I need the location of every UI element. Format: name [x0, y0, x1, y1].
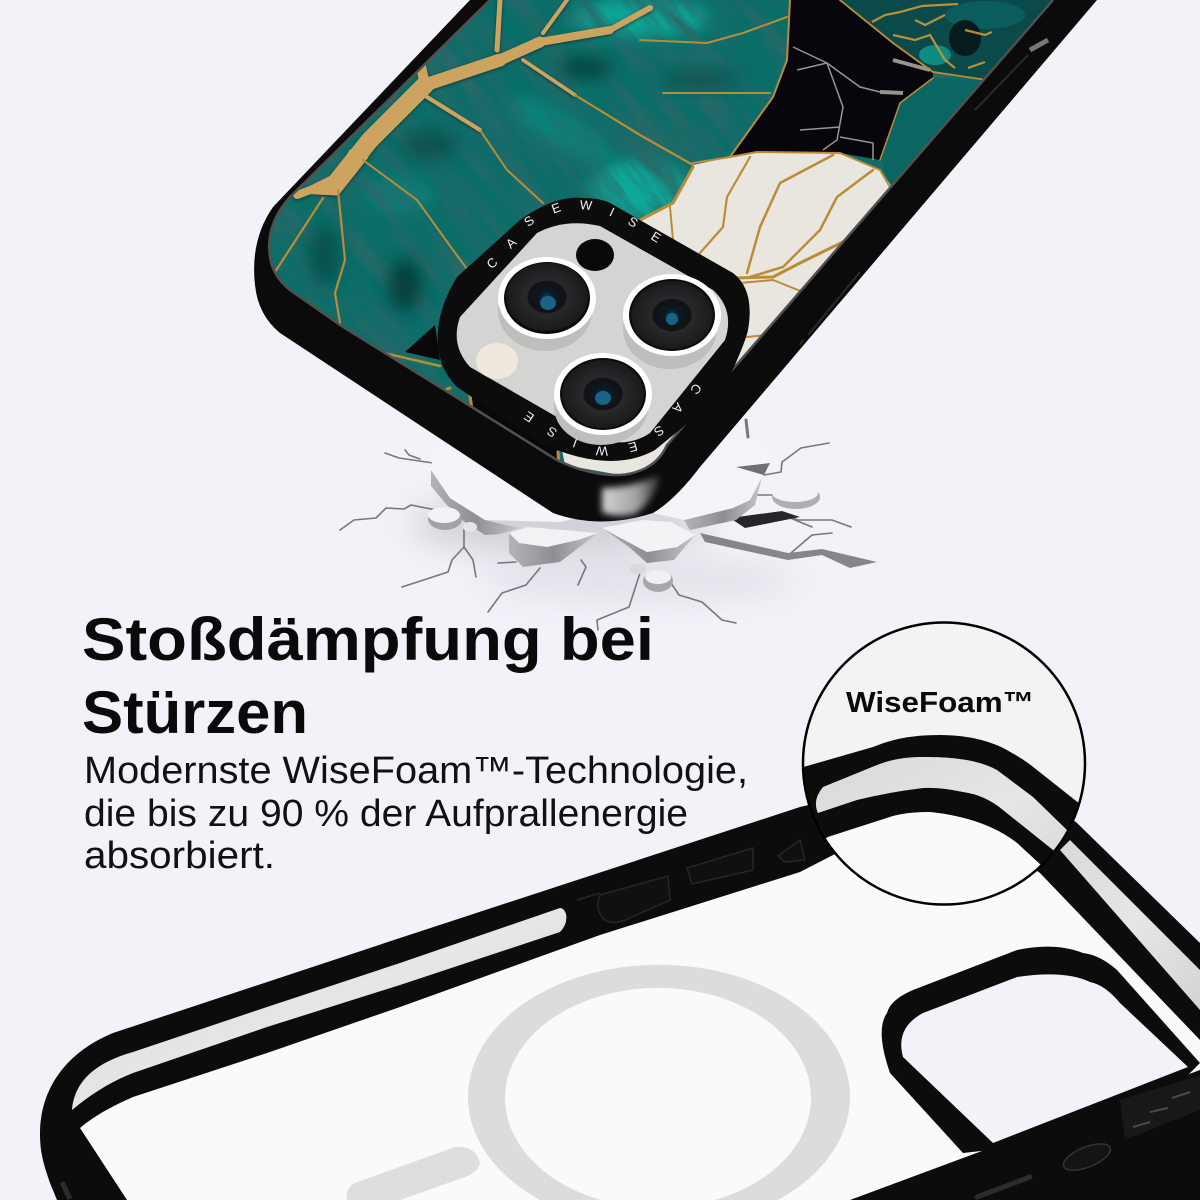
volume buttons — [577, 840, 805, 922]
magnified frame corner — [804, 735, 1078, 864]
gold stem — [297, 0, 650, 195]
ring lettering: S — [651, 422, 667, 440]
ring lettering: E — [549, 199, 563, 217]
heading: Stoßdämpfung bei — [82, 606, 654, 673]
ring lettering: C — [687, 381, 705, 397]
MagSafe ring — [468, 965, 850, 1200]
camera island — [438, 197, 750, 461]
case inner rim — [269, 0, 1053, 475]
ring lettering: E — [648, 228, 664, 246]
body text: die bis zu 90 % der Aufprallenergie — [84, 793, 688, 835]
bumper highlight — [602, 475, 660, 516]
ring lettering: W — [579, 197, 593, 213]
flash — [476, 343, 518, 379]
ring lettering — [483, 197, 705, 459]
illustration: cracked ground impact — [340, 420, 877, 630]
lens: bottom — [554, 353, 652, 445]
phone: marble case dropping onto ground — [254, 0, 1097, 522]
small dark wedge — [405, 325, 440, 360]
clear case black frame — [40, 760, 1200, 1200]
heading: Stürzen — [82, 679, 308, 746]
body text: Modernste WiseFoam™-Technologie, — [84, 750, 748, 792]
ring lettering: I — [571, 435, 579, 451]
side button marks — [800, 40, 1048, 345]
magnifier outline — [803, 622, 1085, 904]
ring lettering: E — [627, 439, 639, 455]
lower frame details — [62, 1075, 1200, 1199]
ring lettering: I — [607, 204, 617, 220]
white marble leaf — [560, 152, 892, 475]
clear case back panel — [80, 800, 1200, 1200]
lower right teal leaf — [882, 78, 976, 184]
camera ring — [438, 198, 750, 461]
lens: top left — [498, 257, 596, 351]
ring lettering: A — [503, 234, 519, 251]
ring lettering: S — [625, 213, 641, 231]
body text — [84, 750, 748, 877]
right air gap — [1060, 840, 1200, 1010]
camera plate — [457, 223, 728, 442]
lens: right — [623, 274, 721, 369]
ring lettering: S — [521, 212, 537, 230]
black marble patch — [730, 0, 933, 160]
marble artwork — [270, 0, 1052, 474]
ring lettering: E — [521, 408, 537, 426]
camera cutout ring — [882, 947, 1200, 1153]
ring lettering: A — [669, 400, 686, 416]
gold veins — [275, 0, 987, 466]
camera cutout opening — [901, 974, 1188, 1143]
body text: absorbiert. — [84, 835, 275, 877]
microphone hole — [576, 239, 614, 271]
ring lettering: W — [595, 443, 609, 459]
phone case body — [254, 0, 1097, 522]
upper right speckled leaf — [840, 0, 1053, 80]
ring lettering: S — [544, 423, 560, 441]
magnifier label: WiseFoam™ — [846, 687, 1034, 719]
callout: WiseFoam magnifier — [802, 621, 1086, 906]
heading — [82, 606, 654, 746]
ring lettering: C — [483, 254, 501, 272]
MagSafe alignment pill — [347, 1147, 480, 1200]
left air gap — [72, 908, 566, 1110]
bottom phone: clear case — [40, 760, 1200, 1200]
